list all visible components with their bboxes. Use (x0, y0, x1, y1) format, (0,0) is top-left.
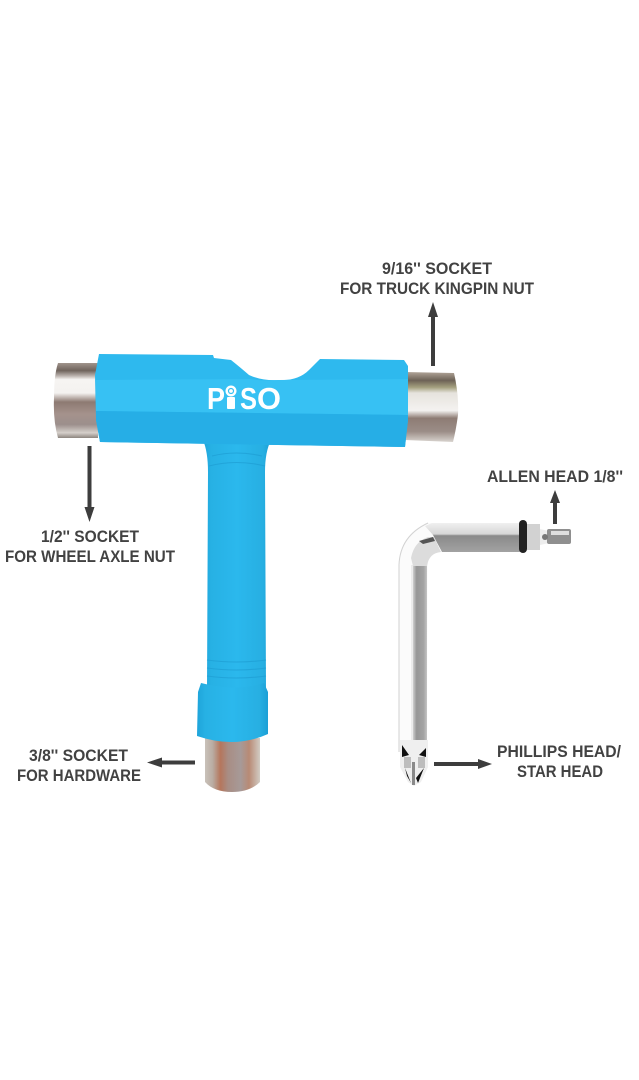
label: 9/16 socket (340, 259, 535, 298)
label: 3/8 socket: FOR HARDWARE (17, 766, 141, 785)
label: 1/2 socket: FOR WHEEL AXLE NUT (5, 547, 176, 566)
label: 3/8 socket: 3/8'' SOCKET (29, 746, 129, 765)
arrow: up to Allen head (550, 490, 560, 524)
arrow: up to 9/16 socket (428, 302, 438, 366)
L-shaped driver: Allen and Phillips bit (399, 520, 571, 786)
label: 3/8 socket (17, 746, 141, 785)
lower collar (197, 683, 268, 742)
T-tool: blue skate tool with sockets (54, 354, 458, 792)
vertical shaft (413, 558, 427, 748)
PiSO logo: S (240, 381, 257, 416)
label: 9/16 socket: FOR TRUCK KINGPIN NUT (340, 279, 535, 298)
label: Phillips head: PHILLIPS HEAD/ (497, 742, 621, 761)
allen head tip (527, 524, 571, 550)
PiSO logo: O (257, 381, 281, 416)
horizontal shaft (425, 523, 520, 552)
black O-ring (519, 520, 527, 553)
arrow: left to 3/8 socket (147, 758, 195, 768)
PiSO logo: P (207, 381, 225, 416)
right 9/16 inch socket (405, 372, 458, 442)
arrow: down from 1/2 socket (84, 446, 94, 522)
label: 1/2 socket (5, 527, 176, 566)
left 1/2 inch socket (54, 363, 98, 438)
label: Phillips head: STAR HEAD (517, 762, 603, 781)
handle (203, 440, 271, 690)
arrow: right from Phillips head (434, 759, 492, 769)
main body (95, 354, 408, 447)
label: Allen head: ALLEN HEAD 1/8'' (487, 467, 623, 486)
label: 1/2 socket: 1/2'' SOCKET (41, 527, 140, 546)
label: Phillips head (497, 742, 621, 781)
white chrome outer bend and left face (399, 523, 445, 752)
label: 9/16 socket: 9/16'' SOCKET (382, 259, 493, 278)
PiSO logo (207, 381, 281, 416)
phillips head tip (400, 740, 428, 786)
bottom 3/8 inch socket (205, 738, 260, 792)
corner highlight (411, 537, 441, 566)
